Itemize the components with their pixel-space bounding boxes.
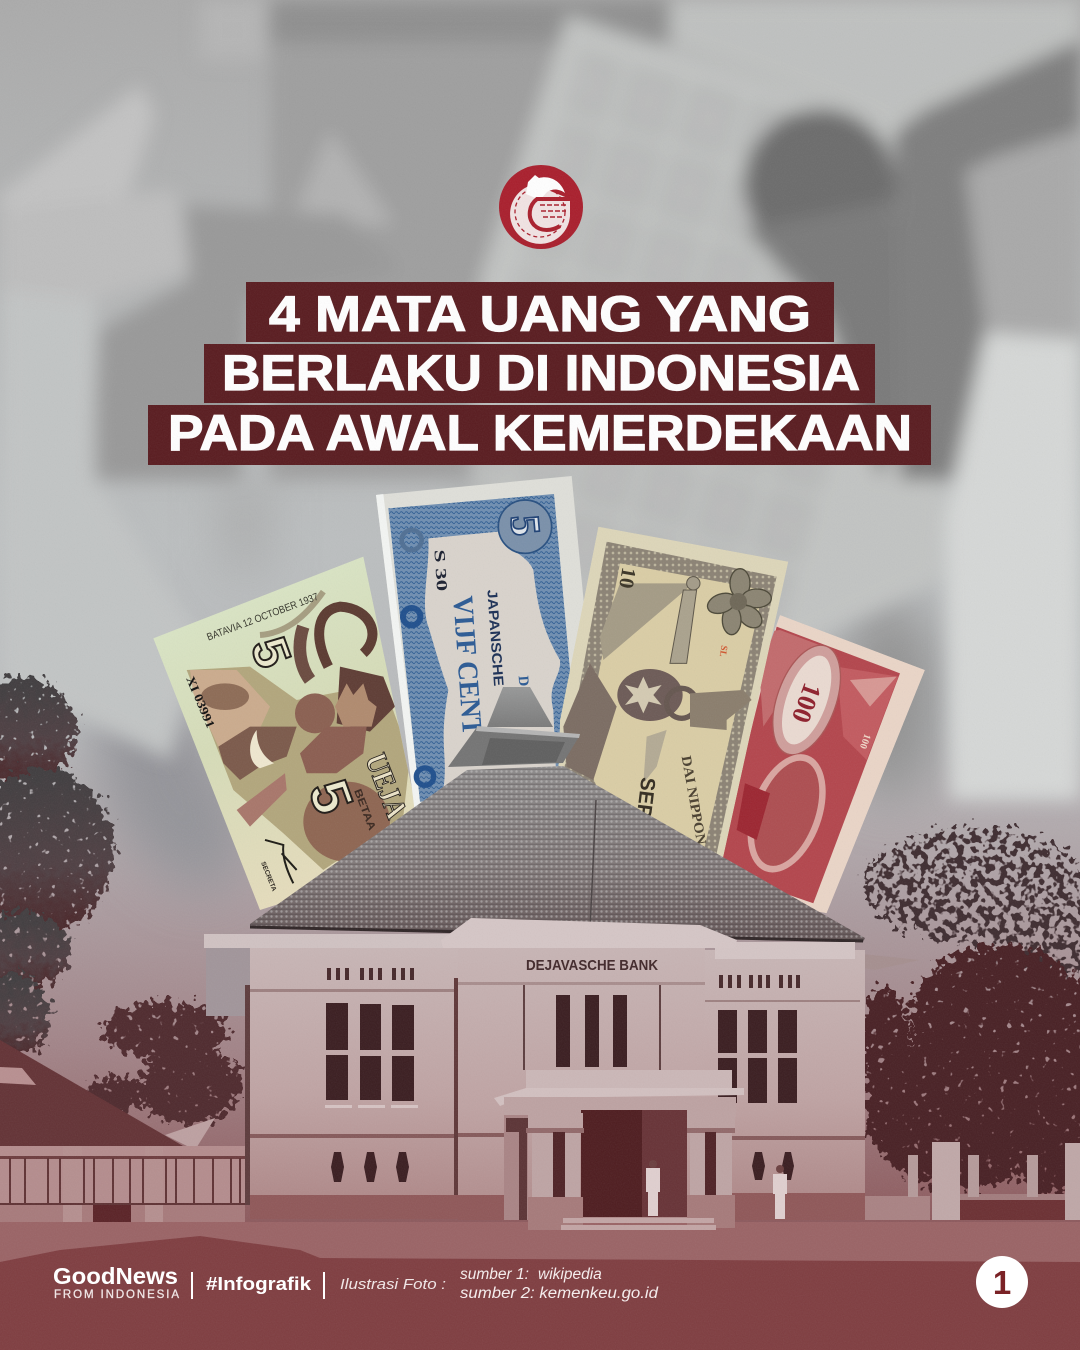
title line 2: BERLAKU DI INDONESIA [222, 345, 860, 401]
right hexagon vents [752, 1152, 794, 1180]
banknote: 5 gulden Java green: 5 [240, 630, 302, 675]
banknote: 5 cent Japanese occupation blue: VIJF CENT [446, 595, 488, 737]
left windows [326, 1003, 414, 1101]
banknote: 5 cent Japanese occupation blue: S 30 [430, 549, 450, 592]
dark wall behind sheet [270, 0, 670, 480]
tiled roof [250, 766, 865, 942]
banknote: 5 cent Japanese occupation blue [376, 476, 600, 813]
left fence [0, 1146, 245, 1230]
eagle head [526, 175, 565, 200]
building: De Javasche Bank [204, 687, 920, 1230]
banknote: 5 gulden Java green: 5 [297, 772, 366, 822]
page number badge: 1 [993, 1264, 1011, 1301]
banknote: 5 gulden Java green: XI 03991 [183, 674, 218, 730]
roof cap [448, 687, 580, 767]
banknote: 10 rupiah Dai Nippon tan: SL [717, 644, 729, 657]
brand wordmark: GoodNews [53, 1263, 178, 1289]
ground [0, 1222, 1080, 1350]
entrance steps [563, 1218, 714, 1223]
right pier [687, 1113, 735, 1228]
emblem inner texture [540, 205, 566, 217]
printed sheet [470, 15, 945, 690]
left vents [327, 968, 414, 980]
banknote: 100 roepiah red: 100 [857, 732, 872, 750]
tree: right canopy [865, 827, 1080, 980]
background: trees and grounds [0, 678, 1080, 1350]
brand wordmark [53, 1263, 179, 1301]
banknote: 10 rupiah Dai Nippon tan: SEPULUH [625, 776, 660, 875]
entrance porch [494, 1070, 787, 1230]
banknote: 100 roepiah red [723, 615, 925, 913]
left figure: hat and face [0, 85, 155, 270]
banknote: 10 rupiah Dai Nippon tan: DAI NIPPON [678, 755, 708, 846]
tree: left small [85, 1002, 242, 1125]
left wing [204, 934, 468, 1219]
fan of four banknotes [150, 476, 925, 920]
source lines: wikipedia [538, 1266, 602, 1283]
emblem G stroke [530, 199, 571, 230]
emblem ring [510, 186, 570, 244]
footer credits [53, 1263, 659, 1302]
right wing [703, 942, 865, 1220]
central windows [556, 995, 627, 1067]
central block [441, 918, 737, 1220]
left house roof [0, 1040, 190, 1150]
banknote: 5 gulden Java green: BATAVIA 12 OCTOBER 1937 [206, 592, 320, 643]
source lines [460, 1266, 659, 1302]
banknote: 5 cent Japanese occupation blue: D [515, 675, 531, 687]
banknote: 5 gulden Java green: SECRETA [259, 861, 277, 893]
banknote: 5 cent Japanese occupation blue: 5 [501, 513, 548, 538]
banknote: 5 gulden Java green: UEJA [358, 749, 414, 823]
bank name: DEJAVASCHE BANK [526, 957, 658, 974]
source lines: sumber 1: [460, 1266, 529, 1283]
right fence [864, 1142, 1080, 1220]
banknote: 100 roepiah red: 100 [786, 679, 828, 727]
right windows [718, 1010, 797, 1103]
left pier [526, 1113, 584, 1230]
hashtag: #Infografik [206, 1274, 312, 1294]
page number badge [976, 1256, 1028, 1308]
figure: guard outside [773, 1165, 787, 1219]
title banner [148, 282, 931, 465]
top-right wall [670, 0, 1080, 130]
banknote: 5 gulden Java green [154, 556, 414, 910]
title line 1: 4 MATA UANG YANG [269, 286, 811, 342]
title line 3: PADA AWAL KEMERDEKAAN [168, 405, 912, 461]
source lines: sumber 2: kemenkeu.go.id [460, 1285, 659, 1302]
banknote: 10 rupiah Dai Nippon tan [558, 526, 788, 857]
tree: right dense [859, 945, 1080, 1195]
banknote: 10 rupiah Dai Nippon tan: 10 [614, 566, 639, 590]
left overhang shadow [206, 946, 252, 1016]
banknote: 5 cent Japanese occupation blue: JAPANSCHE [484, 589, 507, 687]
tree: left large [0, 678, 114, 1057]
brand wordmark: FROM INDONESIA [54, 1289, 179, 1301]
right figures [744, 109, 896, 261]
banknote: 5 gulden Java green: BETAA [351, 787, 378, 833]
left hexagon vents [331, 1152, 409, 1182]
figure: guard at door [646, 1160, 660, 1216]
right vents [719, 975, 800, 988]
photo credit label: Ilustrasi Foto : [340, 1277, 446, 1293]
logo: GoodNews eagle emblem [499, 165, 583, 249]
